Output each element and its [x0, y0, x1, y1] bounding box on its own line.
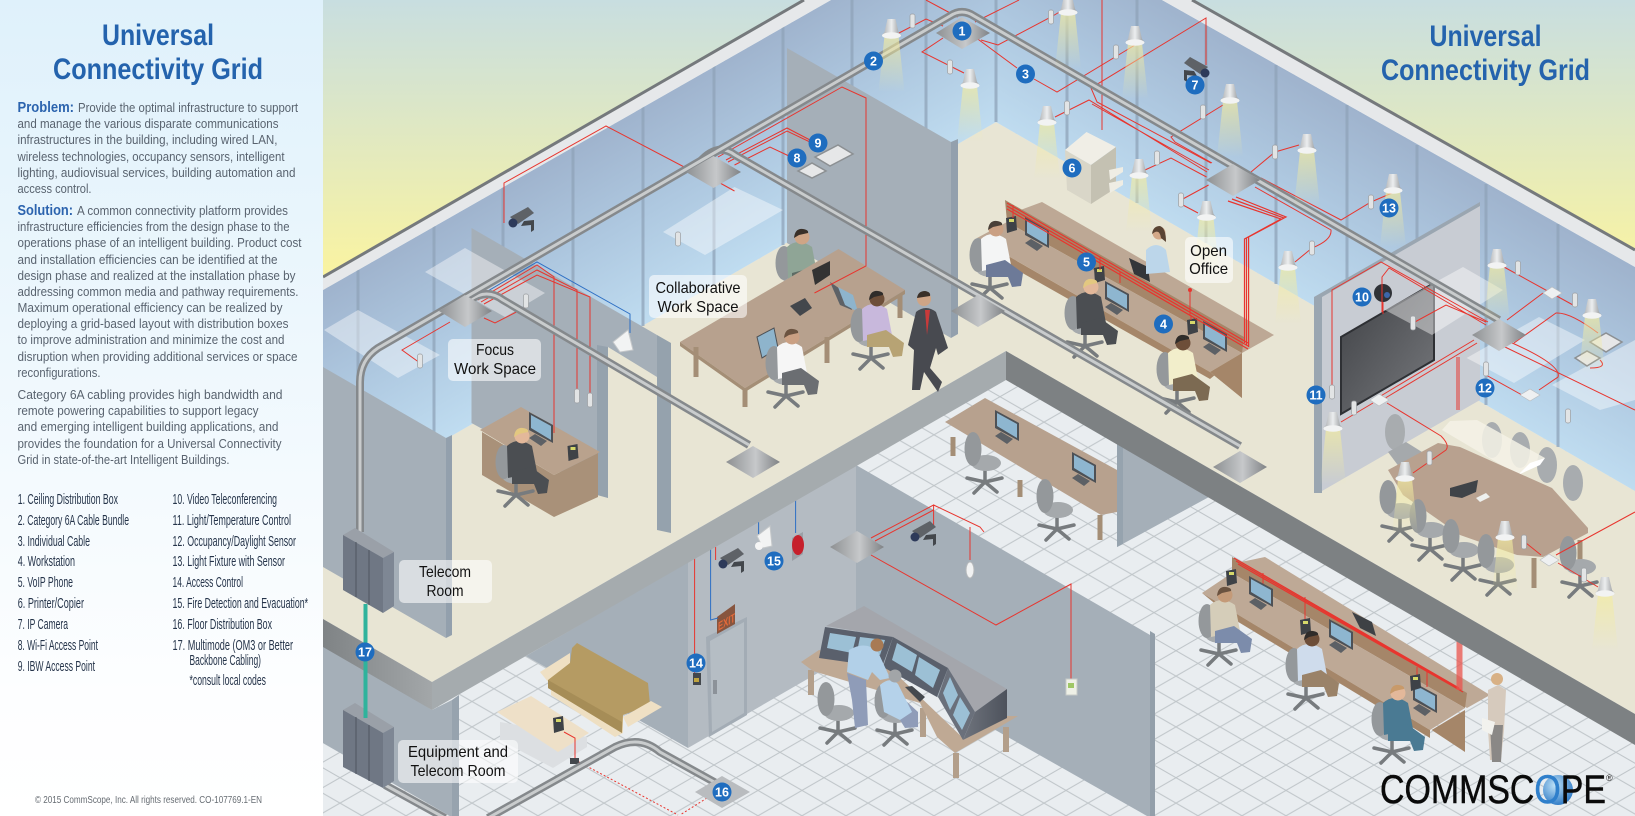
legend: items 1 to 9: 1. Ceiling Distribution Box	[18, 492, 118, 508]
legend: items 1 to 9: 2. Category 6A Cable Bundle	[18, 513, 129, 529]
legend: items 10 to 17: *consult local codes	[190, 673, 266, 689]
telecom room rack	[343, 528, 394, 613]
text block: solution: Solution:	[18, 203, 73, 219]
legend: items 10 to 17: 17. Multimode (OM3 or Better	[172, 638, 293, 654]
logo: CommScope: COMMSCOPE	[1380, 768, 1606, 812]
conduits	[360, 12, 1499, 532]
IP cameras	[508, 57, 1210, 232]
label: collaborative work space: Work Space	[658, 299, 739, 316]
number badges: 9	[815, 136, 822, 150]
text block: solution: reconfigurations.	[18, 365, 100, 380]
legend: items 1 to 9: 8. Wi-Fi Access Point	[18, 638, 98, 654]
wireless and IBW access points	[798, 145, 1622, 366]
text block: category 6A: and emerging intelligent building applications, and	[18, 419, 278, 434]
text block: solution: disruption when providing additional services or space	[18, 349, 298, 364]
text block: category 6A	[18, 387, 282, 467]
label: focus work space	[448, 339, 541, 381]
door and exit sign	[706, 604, 747, 737]
light fixtures	[878, 0, 1618, 650]
legend: items 10 to 17: 16. Floor Distribution Box	[172, 617, 272, 633]
number badges: 14	[689, 656, 703, 670]
printer/copier	[1065, 132, 1123, 204]
text block: solution: deploying a grid-based layout with distribution boxes	[18, 316, 289, 331]
lower desk: workstations	[1198, 557, 1490, 763]
lounge couch and table	[497, 643, 707, 815]
door and exit sign: EXIT	[718, 610, 735, 634]
text block: solution: A common connectivity platform provides	[77, 203, 288, 218]
text block: problem	[17, 100, 298, 196]
partition walls	[323, 48, 1480, 638]
text block: solution: addressing common media and pathway requirements.	[18, 284, 298, 299]
translucent ceiling tiles	[324, 187, 1635, 410]
number badges: 5	[1083, 256, 1090, 270]
open office cable bundle	[1007, 197, 1286, 349]
small sensor boxes	[1370, 287, 1562, 566]
legend: items 1 to 9: 5. VoIP Phone	[18, 575, 73, 591]
lower level walls	[323, 444, 1209, 816]
title: right: Connectivity Grid	[1381, 54, 1590, 87]
legend: items 1 to 9: 4. Workstation	[18, 554, 75, 570]
distribution boxes	[439, 17, 1526, 563]
copyright: © 2015 CommScope, Inc. All rights reserved. CO-107769.1-EN	[35, 795, 262, 806]
category 6A and individual cables	[402, 0, 1635, 587]
text block: problem: infrastructures in the building, including wired LAN,	[18, 132, 278, 147]
text block: problem: access control.	[18, 181, 92, 196]
number badges: 10	[1355, 290, 1369, 304]
number badges: 8	[794, 152, 801, 166]
legend: items 10 to 17: 11. Light/Temperature Control	[172, 513, 291, 529]
title: left: Connectivity Grid	[53, 53, 263, 86]
text block: category 6A: remote powering capabilities to support legacy	[18, 403, 259, 418]
focus desk	[480, 407, 600, 517]
text block: solution: to improve administration and minimize the cost and	[18, 332, 284, 347]
roof edge left	[323, 0, 831, 290]
text block: solution	[18, 203, 302, 380]
title: right: Universal	[1430, 20, 1542, 53]
legend: items 10 to 17: 12. Occupancy/Daylight Sensor	[172, 534, 296, 550]
legend: items 10 to 17: 13. Light Fixture with Sensor	[172, 554, 285, 570]
roof edge right	[1162, 0, 1635, 267]
open office desk	[970, 132, 1274, 413]
legend: items 10 to 17: 10. Video Teleconferencing	[172, 492, 277, 508]
text block: solution: and installation efficiencies can be identified at the	[18, 252, 278, 267]
upper floor slab	[323, 122, 1635, 745]
legend: items 10 to 17: 15. Fire Detection and Evacuation*	[172, 596, 308, 612]
legend: items 10 to 17	[172, 492, 308, 689]
text block: category 6A: provides the foundation for a Universal Connectivity	[18, 436, 282, 451]
sky left	[323, 0, 804, 277]
number badges: 7	[1192, 78, 1199, 92]
IBW speaker on focus wall	[613, 330, 633, 352]
label: focus work space: Work Space	[454, 361, 536, 378]
window wall: left	[323, 0, 996, 438]
title: left	[53, 19, 263, 86]
legend: items 1 to 9: 6. Printer/Copier	[18, 596, 84, 612]
title: right	[1381, 20, 1590, 87]
number badges: 13	[1382, 202, 1396, 216]
text block: solution: Maximum operational efficiency can be realized by	[18, 300, 283, 315]
number badges: 17	[358, 646, 372, 660]
legend: items 10 to 17: 14. Access Control	[172, 575, 243, 591]
number badges: 6	[1069, 162, 1076, 176]
text block: solution: design phase and realized at the installation phase by	[18, 268, 296, 283]
person standing with folder	[1482, 673, 1506, 762]
number badges: 3	[1022, 68, 1029, 82]
ceiling sensors	[418, 10, 1586, 582]
equipment room rack	[343, 703, 394, 788]
title: left: Universal	[102, 19, 214, 52]
label: telecom room	[399, 560, 492, 603]
text block: category 6A: Grid in state-of-the-art Intelligent Buildings.	[18, 452, 230, 467]
label: focus work space: Focus	[476, 342, 514, 359]
legend: items 1 to 9	[18, 492, 129, 675]
number badges: 4	[1160, 318, 1167, 332]
number badges: 16	[715, 786, 729, 800]
legend: items 10 to 17: Backbone Cabling)	[190, 653, 261, 669]
number badges: 12	[1478, 382, 1492, 396]
number badges: 1	[959, 24, 966, 38]
number badges: 15	[767, 554, 781, 568]
label: open office: Open	[1190, 243, 1227, 260]
text block: solution: operations phase of an intelligent building. Product cost	[18, 235, 302, 250]
text block: problem: Provide the optimal infrastructure to support	[78, 100, 298, 115]
label: equipment and telecom room	[398, 740, 518, 783]
collaborative table and people	[680, 229, 905, 407]
person walking	[908, 291, 948, 392]
sky right	[1192, 0, 1635, 250]
conference room	[1380, 414, 1597, 597]
label: open office	[1185, 237, 1233, 283]
label: equipment and telecom room: Telecom Room	[410, 763, 506, 780]
label: telecom room: Telecom	[419, 564, 471, 581]
label: equipment and telecom room: Equipment and	[408, 744, 508, 761]
number badges: 11	[1309, 388, 1323, 402]
text block: problem: lighting, audiovisual services, building automation and	[18, 165, 296, 180]
text block: category 6A: Category 6A cabling provides high bandwidth and	[18, 387, 282, 402]
legend: items 1 to 9: 7. IP Camera	[18, 617, 69, 633]
left text panel	[0, 0, 323, 816]
number badges	[356, 22, 1494, 802]
video screen and camera	[1341, 283, 1434, 414]
label: collaborative work space: Collaborative	[656, 280, 741, 297]
number badges: 2	[870, 54, 877, 68]
text block: problem: wireless technologies, occupancy sensors, intelligent	[17, 149, 285, 164]
lower conduit to floor box	[385, 742, 716, 816]
upper desk on lower level	[945, 398, 1117, 540]
window wall: right	[996, 0, 1635, 491]
multimode backbone cable	[364, 604, 368, 718]
legend: items 1 to 9: 3. Individual Cable	[18, 534, 90, 550]
security console	[801, 606, 1018, 778]
label: telecom room: Room	[426, 583, 464, 600]
floor distribution box	[695, 776, 750, 808]
text block: problem: Problem:	[18, 100, 74, 116]
lower level cables and devices	[693, 500, 1077, 695]
legend: items 1 to 9: 9. IBW Access Point	[18, 659, 95, 675]
label: open office: Office	[1189, 261, 1228, 278]
text block: problem: and manage the various disparate communications	[18, 116, 279, 131]
logo: CommScope: ®	[1606, 773, 1613, 783]
text block: solution: infrastructure efficiencies from the design phase to the	[18, 219, 290, 234]
label: collaborative work space	[649, 275, 747, 318]
